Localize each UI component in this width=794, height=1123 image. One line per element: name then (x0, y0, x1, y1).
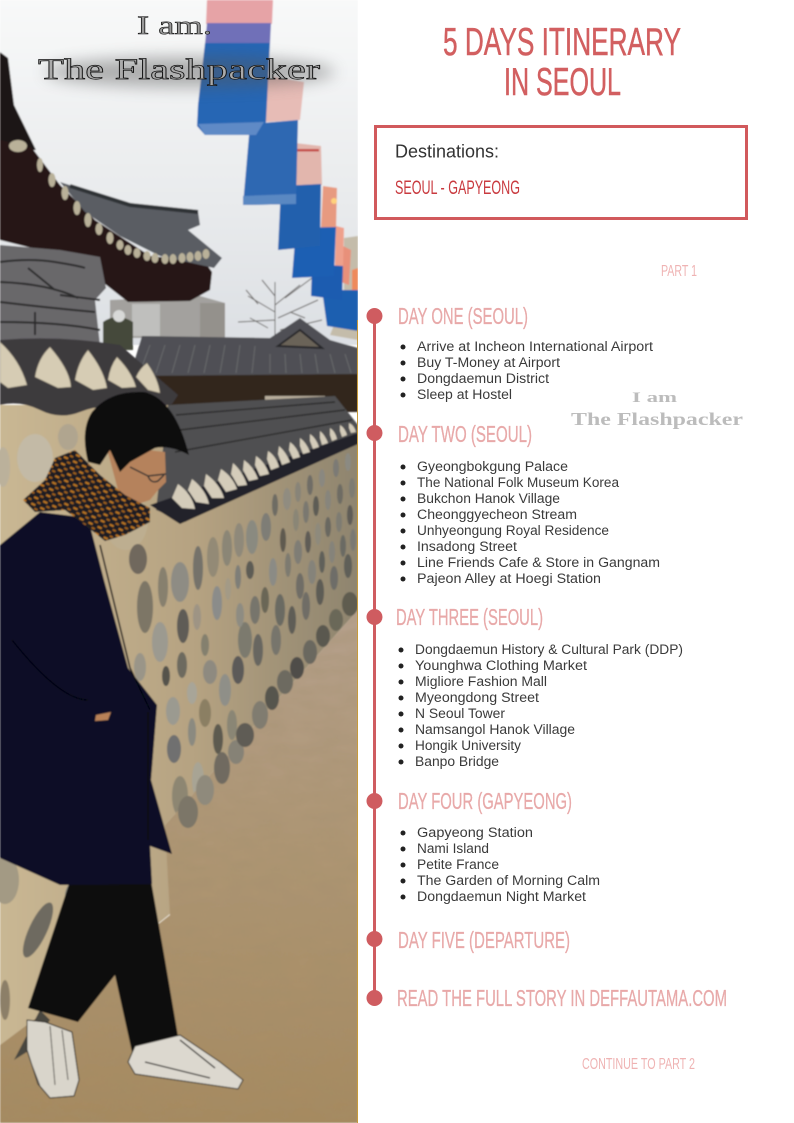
right shoe (128, 1035, 243, 1089)
day two list: Unhyeongung Royal Residence (417, 523, 609, 538)
background apartment building (103, 296, 225, 350)
day three list: Younghwa Clothing Market (415, 658, 587, 673)
photo: man leaning on a hanok wall under lanterns (0, 0, 359, 1123)
hair (85, 392, 189, 472)
day four list: Dongdaemun Night Market (417, 889, 586, 904)
panel: destinations: Destinations: (395, 142, 499, 162)
top left roof (0, 52, 222, 302)
day one list: Sleep at Hostel (417, 387, 512, 402)
lanterns (197, 0, 358, 340)
ground texture (86, 667, 357, 1021)
day four list: Gapyeong Station (417, 825, 533, 840)
day three list: Banpo Bridge (415, 754, 499, 769)
watermark: I am The Flashpacker: The Flashpacker (571, 409, 743, 429)
day three list: N Seoul Tower (415, 706, 506, 721)
day four list (400, 825, 600, 904)
day three list: Myeongdong Street (415, 690, 539, 705)
day five heading: DAY FIVE (DEPARTURE) (398, 927, 570, 953)
distant hanok roof (130, 318, 358, 412)
stacked tiles at left (0, 245, 178, 416)
wall top tiles (150, 396, 358, 524)
continue to part 2 label: CONTINUE TO PART 2 (582, 1056, 695, 1073)
day three list: Migliore Fashion Mall (415, 674, 547, 689)
day one list: Buy T-Money at Airport (417, 355, 560, 370)
legs (28, 875, 180, 1052)
day four list: Petite France (417, 857, 499, 872)
title (443, 21, 681, 104)
day one list: Dongdaemun District (417, 371, 549, 386)
panel: destinations (376, 126, 746, 218)
watermark: I am The Flashpacker on photo: I am. (137, 11, 212, 40)
timeline (366, 308, 382, 1006)
day two list (400, 459, 660, 586)
day two list: Pajeon Alley at Hoegi Station (417, 571, 601, 586)
left shoe (27, 1020, 79, 1098)
day two heading: DAY TWO (SEOUL) (398, 421, 532, 447)
day two list: Line Friends Cafe & Store in Gangnam (417, 555, 660, 570)
rocks along wall base (178, 592, 358, 828)
watermark: I am The Flashpacker: I am (632, 390, 678, 406)
day one list (400, 339, 653, 402)
day two list: Bukchon Hanok Village (417, 491, 560, 506)
title: 5 DAYS ITINERARY (443, 21, 681, 64)
coat (0, 512, 172, 885)
title: IN SEOUL (504, 61, 621, 104)
panel: destinations: SEOUL - GAPYEONG (395, 178, 520, 199)
sky (0, 0, 358, 345)
watermark: I am The Flashpacker (571, 390, 743, 429)
day three list: Dongdaemun History & Cultural Park (DDP) (415, 642, 683, 657)
day two list: Insadong Street (417, 539, 517, 554)
day three heading: DAY THREE (SEOUL) (396, 604, 543, 630)
day one heading: DAY ONE (SEOUL) (398, 303, 528, 329)
day four heading: DAY FOUR (GAPYEONG) (398, 788, 572, 814)
day three list (398, 642, 683, 769)
photo edge line (357, 320, 358, 1123)
scarf (23, 450, 150, 541)
day four list: The Garden of Morning Calm (417, 873, 600, 888)
watermark: I am The Flashpacker on photo (38, 11, 335, 87)
day one list: Arrive at Incheon International Airport (417, 339, 653, 354)
stone wall (0, 405, 358, 1045)
watermark: I am The Flashpacker on photo: The Flashpacker (38, 53, 320, 86)
day two list: The National Folk Museum Korea (417, 475, 619, 490)
person (0, 392, 243, 1098)
day two list: Gyeongbokgung Palace (417, 459, 568, 474)
face (106, 445, 166, 505)
part 1 label: PART 1 (661, 263, 697, 280)
bare tree (238, 278, 322, 336)
ground (0, 610, 358, 1123)
day two list: Cheonggyecheon Stream (417, 507, 577, 522)
day three list: Namsangol Hanok Village (415, 722, 575, 737)
day four list: Nami Island (417, 841, 489, 856)
wall stones (0, 424, 356, 1020)
day three list: Hongik University (415, 738, 521, 753)
